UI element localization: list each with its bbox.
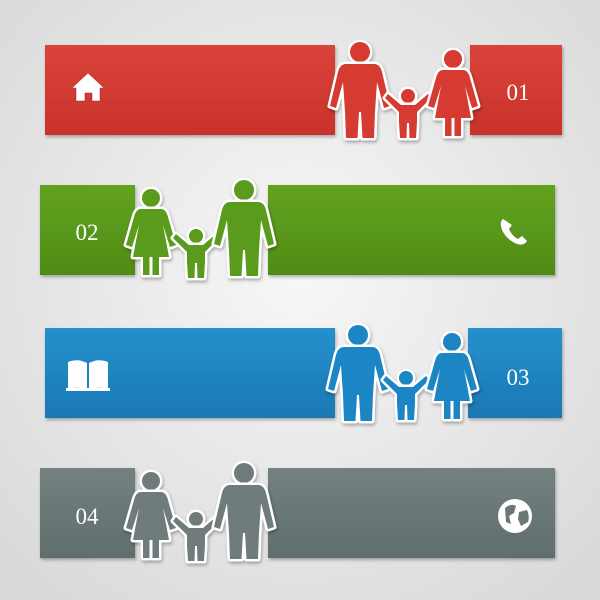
band 2: green: [40, 180, 555, 278]
number 02: 02: [76, 220, 98, 245]
family 3: [328, 325, 477, 421]
family 1: [330, 42, 478, 138]
family 2: [126, 180, 274, 278]
icon: phone: [501, 219, 527, 245]
band 3: blue: [45, 325, 562, 421]
icon: book: [66, 360, 110, 391]
band 4: gray: [40, 463, 555, 561]
band 1: red: [45, 42, 562, 138]
icon: house: [72, 73, 104, 101]
family 4: [126, 463, 274, 561]
number 04: 04: [76, 504, 99, 529]
number 03: 03: [506, 365, 530, 390]
icon: globe: [498, 499, 532, 533]
number 01: 01: [506, 80, 530, 105]
